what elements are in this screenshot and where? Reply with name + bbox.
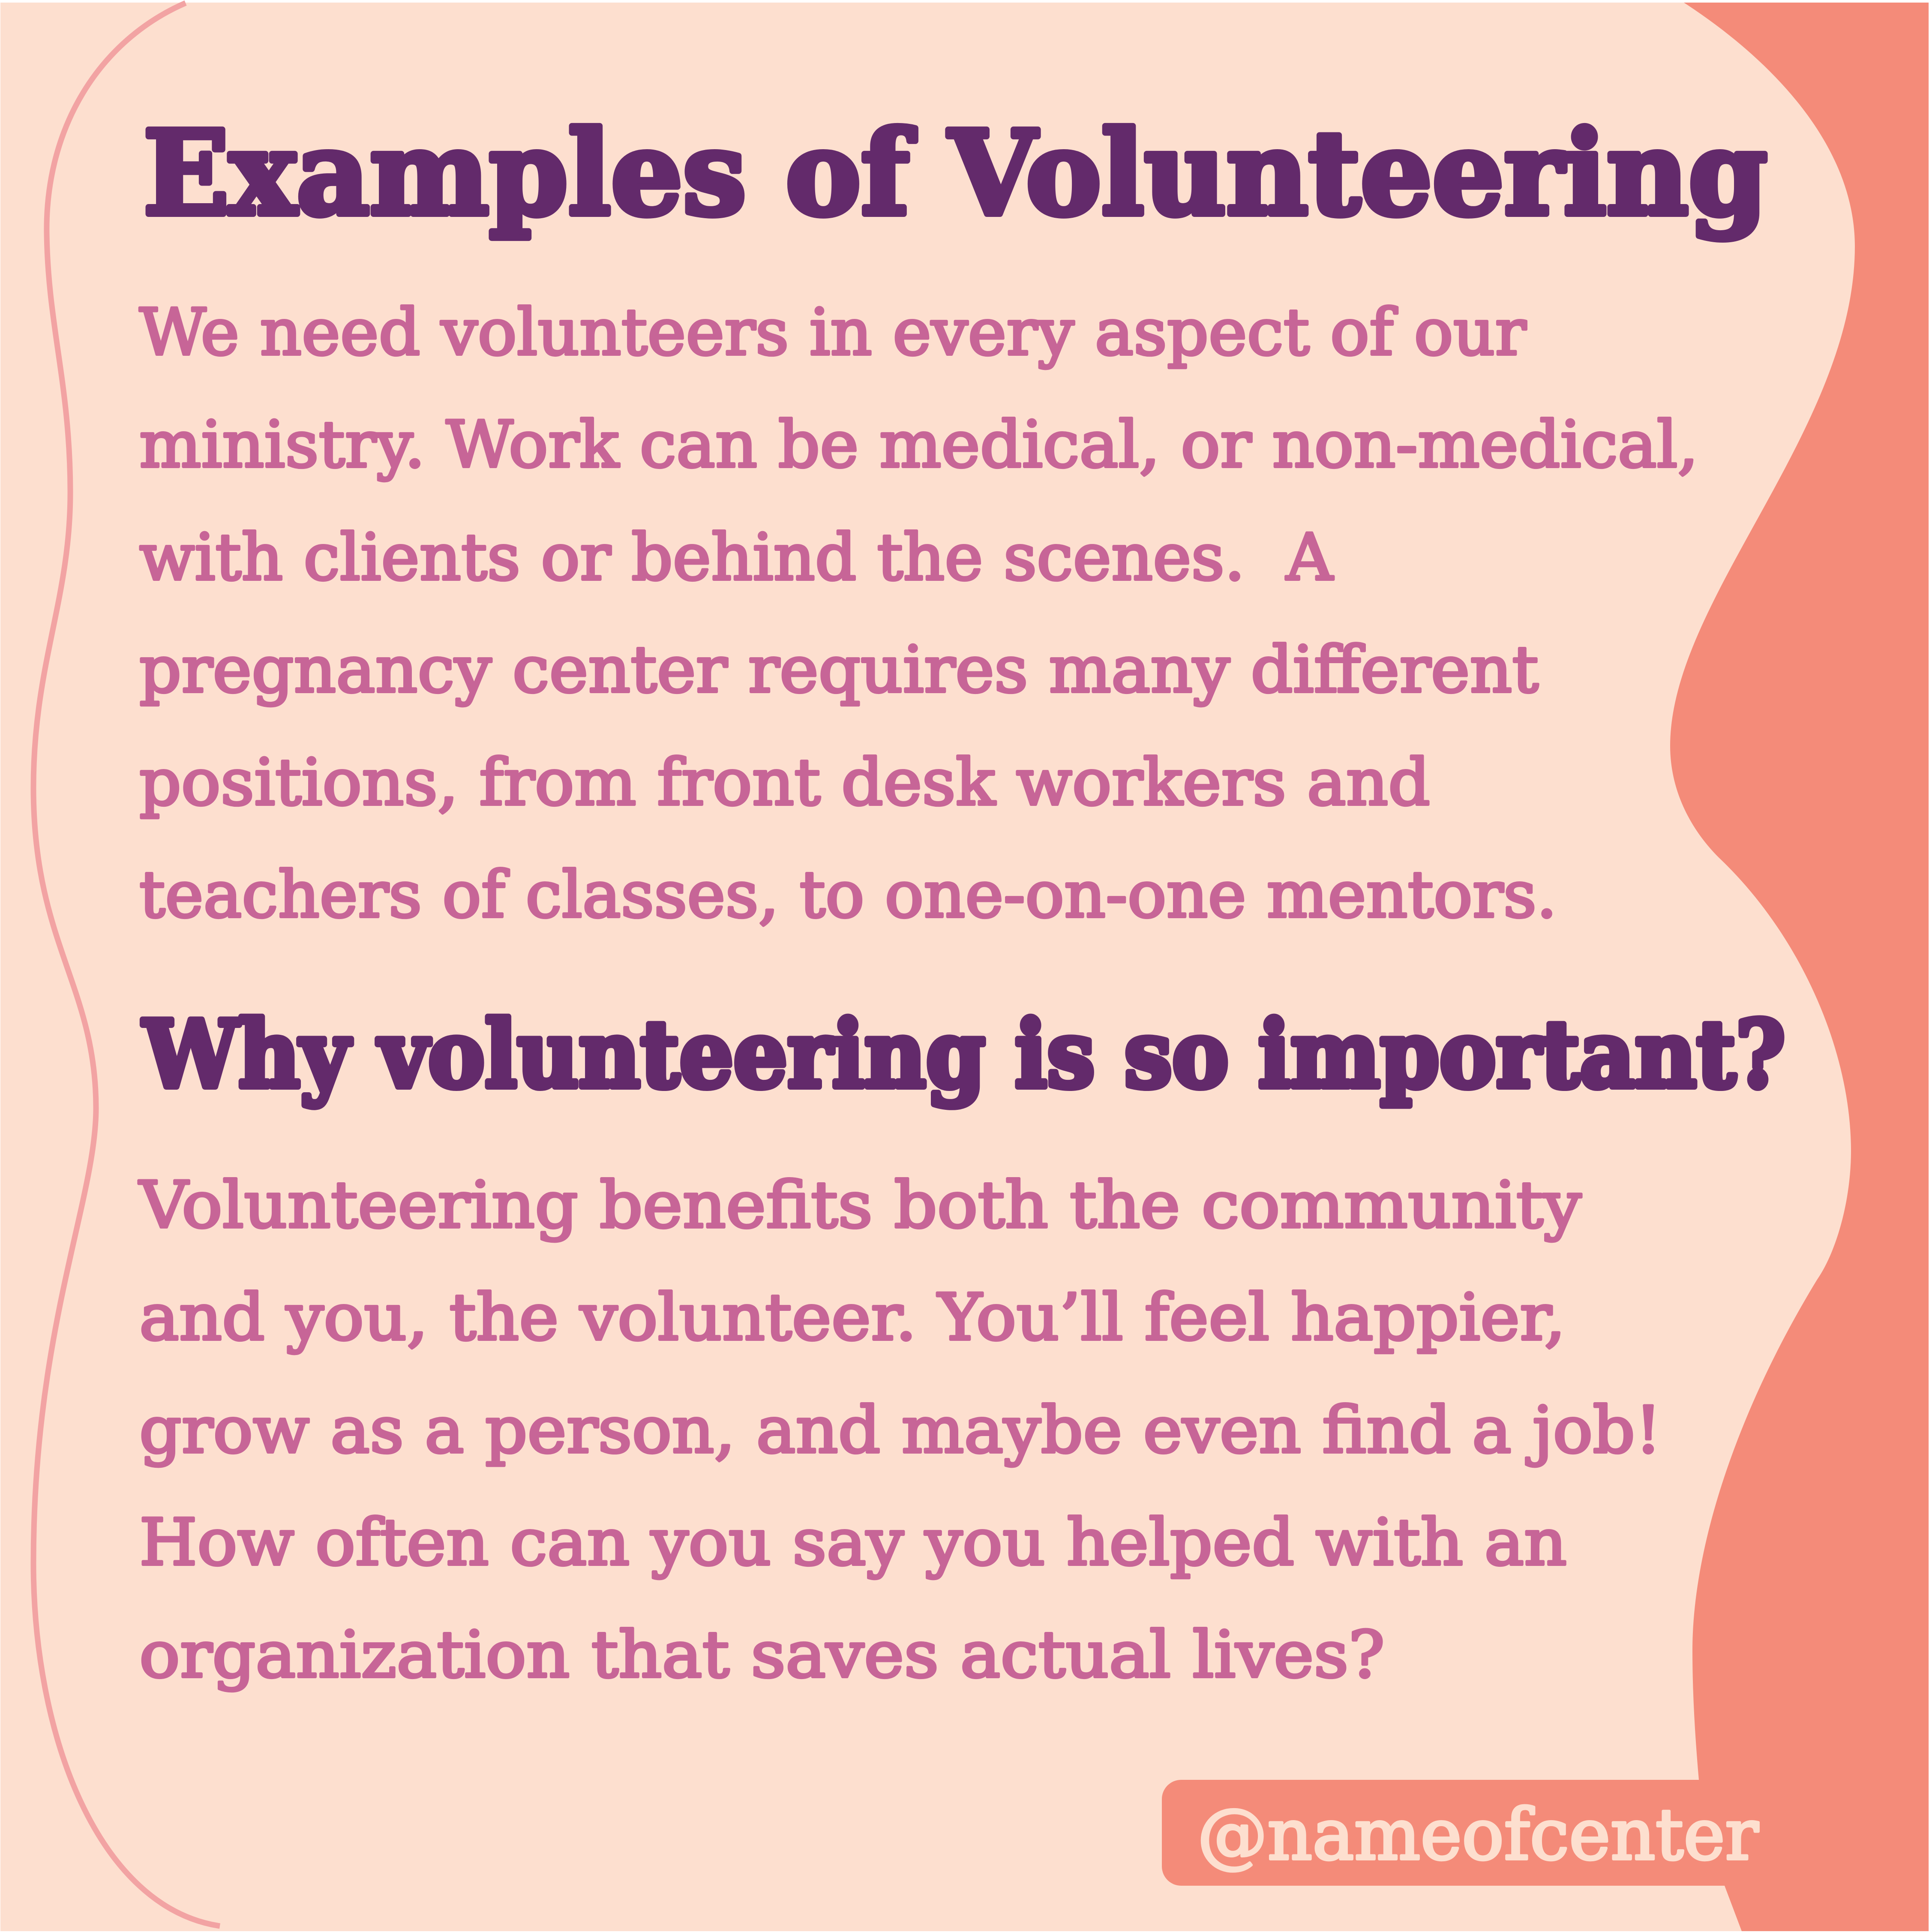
heading: why volunteering: Why volunteering is so important? [142, 1000, 1785, 1109]
text block: benefits paragraph: organization that saves actual lives? [139, 1618, 1385, 1692]
text block: benefits paragraph: Volunteering benefits both the community [138, 1168, 1581, 1243]
text block: examples paragraph: positions, from front desk workers and [139, 745, 1430, 820]
text block: examples paragraph: teachers of classes, to one-on-one mentors. [139, 858, 1557, 932]
text block: benefits paragraph: How often can you say you helped with an [139, 1505, 1567, 1580]
text block: benefits paragraph [138, 1168, 1662, 1692]
handle tag [1162, 1780, 1758, 1886]
text block: examples paragraph: with clients or behind the scenes. A [139, 520, 1334, 595]
salmon wavy right band [1670, 3, 1929, 1931]
text block: examples paragraph: ministry. Work can be medical, or non-medical, [139, 408, 1698, 482]
title: Examples of Volunteering [143, 105, 1767, 241]
text block: examples paragraph [139, 295, 1698, 932]
text block: examples paragraph: pregnancy center requires many different [139, 633, 1539, 707]
text block: benefits paragraph: grow as a person, and maybe even find a job! [139, 1393, 1662, 1468]
pink wavy outline on left [33, 3, 220, 1926]
text block: benefits paragraph: and you, the volunteer. You’ll feel happier, [139, 1280, 1566, 1355]
handle text: @nameofcenter [1197, 1794, 1758, 1876]
text block: examples paragraph: We need volunteers in every aspect of our [139, 295, 1526, 370]
tag background [1162, 1780, 1757, 1886]
